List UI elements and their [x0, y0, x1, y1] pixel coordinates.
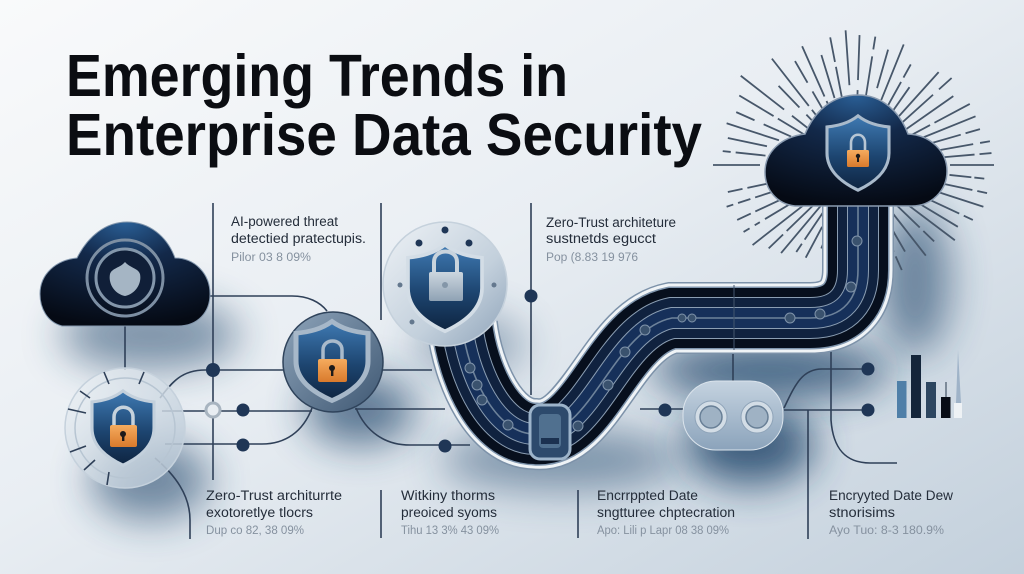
text: working norms: Tihu 13 3% 43 09% — [401, 525, 499, 537]
text: encrypted data flow: stnorisims — [829, 505, 895, 520]
data pipeline — [462, 196, 862, 459]
text: zero-trust architecture — [546, 215, 676, 264]
text: zero-trust exploratory: exotoretlye tlocrs — [206, 505, 313, 520]
text: encrypted data signature: Encrrppted Date — [597, 488, 698, 503]
icon: left shield disc — [65, 368, 185, 488]
text: working norms: Witkiny thorms — [401, 488, 495, 503]
text: zero-trust architecture: sustnetds egucct — [546, 231, 656, 246]
icon: twin-dial pill — [683, 381, 783, 450]
text: zero-trust exploratory: Zero-Trust architurrte — [206, 488, 342, 503]
node dots — [206, 290, 874, 452]
text: AI threat detection: detectied pratectupis. — [231, 231, 366, 246]
text: zero-trust architecture: Pop (8.83 19 976 — [546, 252, 638, 264]
title — [66, 43, 702, 168]
radiating rays — [713, 30, 994, 270]
icon: left cloud — [40, 222, 210, 326]
pipeline chip — [530, 405, 570, 459]
icon: silver lock disc — [383, 222, 507, 346]
text: encrypted data signature — [597, 488, 735, 537]
title: Enterprise Data Security — [66, 102, 702, 168]
text: working norms: preoiced syoms — [401, 505, 497, 520]
pipeline nodes — [465, 236, 862, 431]
text: working norms — [401, 488, 499, 537]
text: encrypted data flow — [829, 488, 953, 537]
title: Emerging Trends in — [66, 43, 568, 109]
text: AI threat detection — [231, 214, 366, 264]
text: encrypted data flow: Encryyted Date Dew — [829, 488, 953, 503]
soft drop shadows — [60, 205, 950, 520]
text: zero-trust architecture: Zero-Trust architeture — [546, 215, 676, 230]
icon: top cloud with shield — [765, 95, 947, 206]
text: encrypted data signature: Apo: Lili p Lapr 08 38 09% — [597, 525, 729, 537]
bar chart — [897, 350, 962, 418]
text: encrypted data signature: sngtturee chptecration — [597, 505, 735, 520]
connector lines and nodes — [125, 203, 897, 539]
text: zero-trust exploratory — [206, 488, 342, 537]
text: AI threat detection: AI-powered threat — [231, 214, 338, 229]
icon: middle shield disc — [283, 312, 383, 412]
text: AI threat detection: Pilor 03 8 09% — [231, 252, 311, 264]
text: encrypted data flow: Ayo Tuo: 8-3 180.9% — [829, 525, 944, 537]
text: zero-trust exploratory: Dup co 82, 38 09% — [206, 525, 304, 537]
